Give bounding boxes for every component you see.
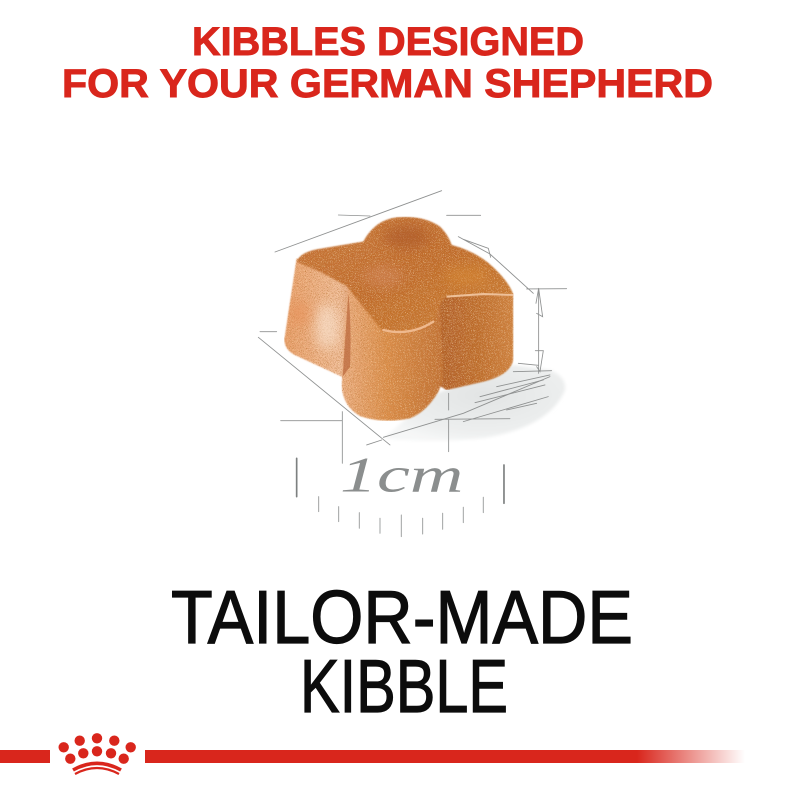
title: kibbles designed for your German Shepherd bbox=[62, 20, 713, 106]
title: kibbles designed for your German Shepherd: KIBBLES DESIGNED bbox=[192, 20, 584, 64]
kibble: left face bbox=[284, 258, 353, 377]
kibble: left face highlights bbox=[290, 300, 338, 350]
kibble: top face colour patches bbox=[363, 225, 490, 287]
sketch: 1cm scale bbox=[297, 458, 504, 537]
footer bar right bbox=[145, 750, 745, 763]
title: kibbles designed for your German Shepherd: FOR YOUR GERMAN SHEPHERD bbox=[62, 62, 713, 106]
kibble: right face bbox=[430, 293, 513, 390]
sketch lines bbox=[258, 191, 567, 463]
kibble: top face bbox=[297, 217, 513, 332]
icon: Royal Canin crown bbox=[58, 733, 136, 774]
kibble: front lobe bbox=[342, 280, 443, 421]
heading: tailor-made kibble: TAILOR-MADE bbox=[171, 575, 633, 659]
heading: tailor-made kibble: KIBBLE bbox=[300, 644, 508, 728]
handwritten 1cm (as text): 1cm bbox=[340, 447, 463, 503]
heading: tailor-made kibble bbox=[171, 575, 633, 728]
illustration: kibble with 1cm sketch bbox=[258, 191, 567, 537]
footer bar left bbox=[0, 750, 50, 763]
